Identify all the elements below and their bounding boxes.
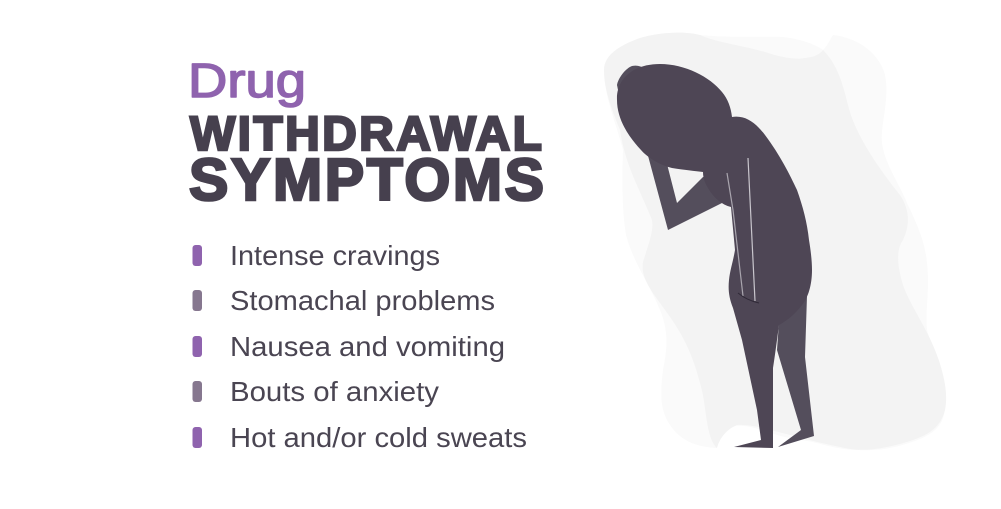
item: Intense cravings: Intense cravings (230, 240, 440, 271)
item: Bouts of anxiety: Bouts of anxiety (230, 376, 439, 407)
background blob: inner (604, 33, 946, 450)
back leg (777, 296, 814, 447)
jacket seams (727, 158, 759, 303)
title line: WITHDRAWAL: WITHDRAWAL (190, 108, 542, 161)
symptom list (192, 240, 527, 453)
head and torso with front leg (617, 64, 812, 448)
title (188, 55, 544, 213)
item: Hot and/or cold sweats: Hot and/or cold sweats (230, 422, 527, 453)
illustration: person with head in hand (604, 33, 946, 450)
arm supporting head (647, 152, 735, 230)
background blob: outer (604, 33, 945, 450)
title line: Drug: Drug (188, 55, 306, 108)
item: Nausea and vomiting: Nausea and vomiting (230, 331, 505, 362)
item: Stomachal problems: Stomachal problems (230, 285, 495, 316)
title line: SYMPTOMS: SYMPTOMS (189, 147, 544, 213)
hair bun (617, 66, 645, 92)
